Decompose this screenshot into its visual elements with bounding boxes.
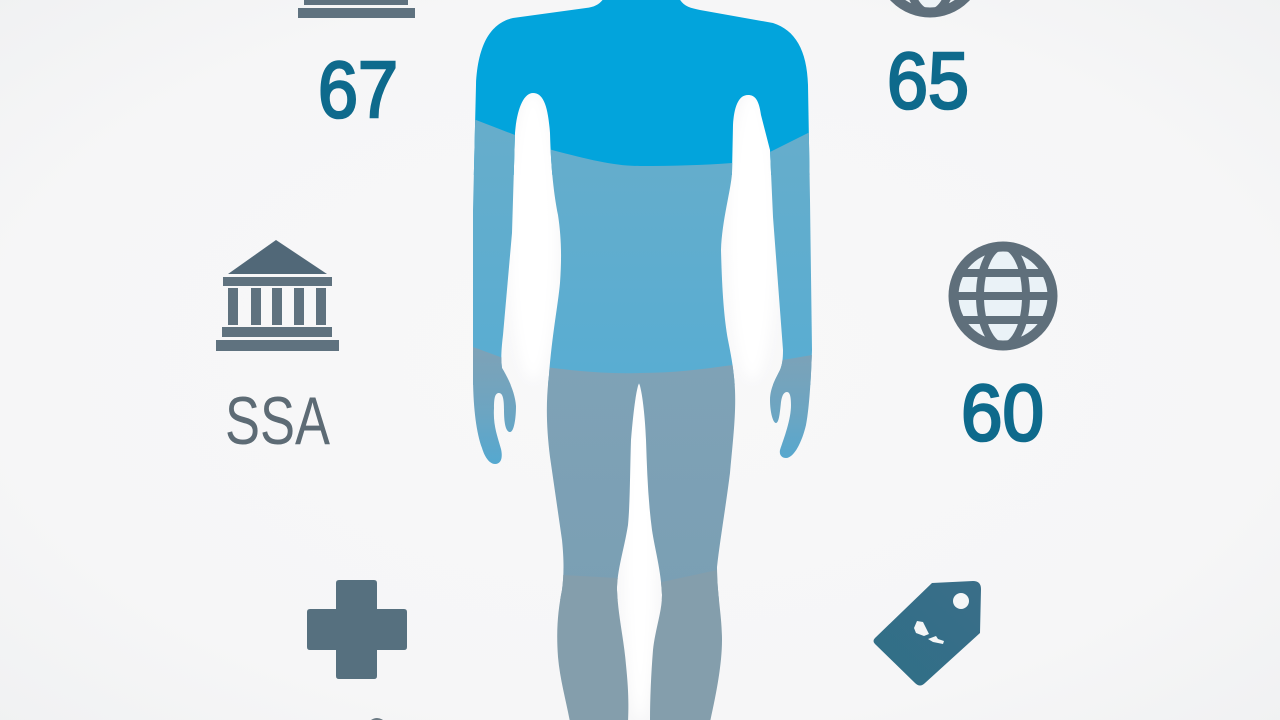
icon: globe bbox=[953, 246, 1053, 346]
body band: hands bbox=[473, 347, 812, 464]
body band: upper torso and shoulders bbox=[460, 0, 825, 175]
body band: thighs bbox=[540, 364, 740, 600]
number: 65: 65 bbox=[887, 36, 969, 125]
cropped digit top bbox=[371, 718, 383, 720]
icon: globe top cropped bbox=[880, 0, 980, 13]
body band: lower legs bbox=[557, 570, 722, 720]
number: 60: 60 bbox=[961, 368, 1044, 457]
body band: mid torso and arms bbox=[460, 114, 825, 385]
human body figure bbox=[460, 0, 825, 720]
icon: medical cross bbox=[307, 580, 407, 679]
label: SSA: SSA bbox=[225, 383, 330, 459]
number: 67: 67 bbox=[318, 45, 398, 134]
icon: bank top cropped bbox=[298, 0, 415, 18]
icon: bank building bbox=[216, 240, 339, 351]
tag mark bbox=[914, 621, 944, 644]
icon: price tag bbox=[874, 581, 981, 686]
